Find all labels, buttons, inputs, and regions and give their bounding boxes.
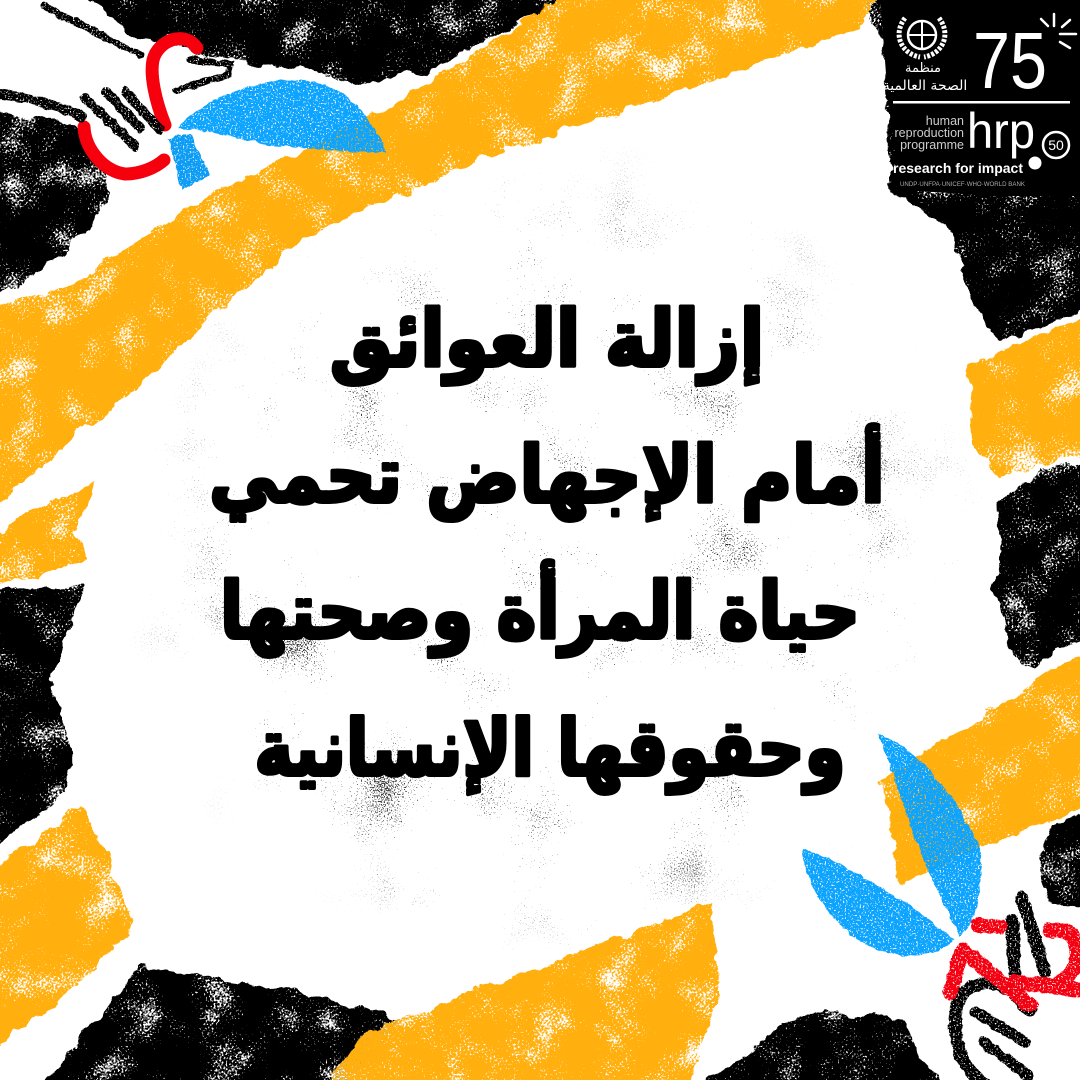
headline line 2: أمام الإجهاض تحمي	[209, 424, 885, 522]
logo: 50 badge: 50	[1048, 137, 1064, 153]
logo backdrop	[880, 0, 1080, 196]
headline text	[209, 294, 885, 794]
logo: human reproduction programme	[894, 114, 964, 152]
yellow stroke: right	[968, 310, 1080, 476]
black stroke: top right	[860, 0, 1080, 345]
logo: human reproduction programme: reproduction	[894, 126, 964, 140]
logo: WHO Arabic name: منظمة	[905, 61, 941, 76]
scissor blade: blue lower	[802, 848, 955, 955]
top-left pair of scissors	[0, 6, 385, 190]
ink speckle texture	[124, 148, 990, 968]
logo divider	[893, 101, 1070, 104]
black stroke: middle right	[995, 458, 1080, 668]
headline line 1: إزالة العوائق	[330, 294, 764, 386]
scissor handle: black	[955, 898, 1045, 1080]
scissor handle: red	[950, 925, 1080, 1005]
logo: hrp dot	[1028, 156, 1042, 170]
yellow band: main diagonal	[0, 0, 895, 520]
black stroke: top	[62, 0, 600, 84]
yellow stroke: small left	[0, 482, 95, 592]
scissor blade: blue upper	[878, 733, 981, 937]
black stroke: bottom left	[30, 965, 400, 1080]
logo: human reproduction programme: human	[926, 114, 964, 128]
scissor blade: blue long	[178, 80, 385, 152]
bottom-right pair of scissors	[802, 733, 1080, 1080]
logo: hrp wordmark: hrp	[967, 103, 1035, 159]
black stroke: bottom right	[680, 1012, 950, 1080]
yellow stroke: bottom centre	[320, 902, 718, 1080]
yellow stroke: lower right	[882, 640, 1080, 885]
logo: WHO Arabic name	[883, 61, 967, 94]
logo: human reproduction programme: programme	[900, 138, 964, 152]
black stroke: lower right	[1038, 808, 1080, 905]
logo: 50 badge	[1043, 132, 1069, 158]
logo: partners: UNDP·UNFPA·UNICEF·WHO·WORLD BANK	[900, 181, 1026, 188]
logo: 75 anniversary: 75	[973, 16, 1047, 105]
scissor handle: red	[84, 39, 197, 174]
scissor blade: blue short	[168, 133, 210, 190]
logo: sun rays	[1041, 14, 1076, 48]
black stroke: upper left	[0, 108, 112, 300]
headline line 4: وحقوقها الإنسانية	[254, 704, 846, 794]
logo: research for impact: research for impact	[893, 160, 1023, 176]
scissor handle: black strokes	[0, 6, 230, 146]
yellow stroke: lower left	[0, 805, 135, 1060]
black stroke: middle left	[0, 585, 85, 860]
logo: WHO Arabic name: الصحة العالمية	[883, 78, 967, 94]
logo block	[883, 14, 1076, 188]
logo: WHO emblem	[899, 18, 945, 57]
headline line 3: حياة المرأة وصحتها	[220, 560, 860, 657]
